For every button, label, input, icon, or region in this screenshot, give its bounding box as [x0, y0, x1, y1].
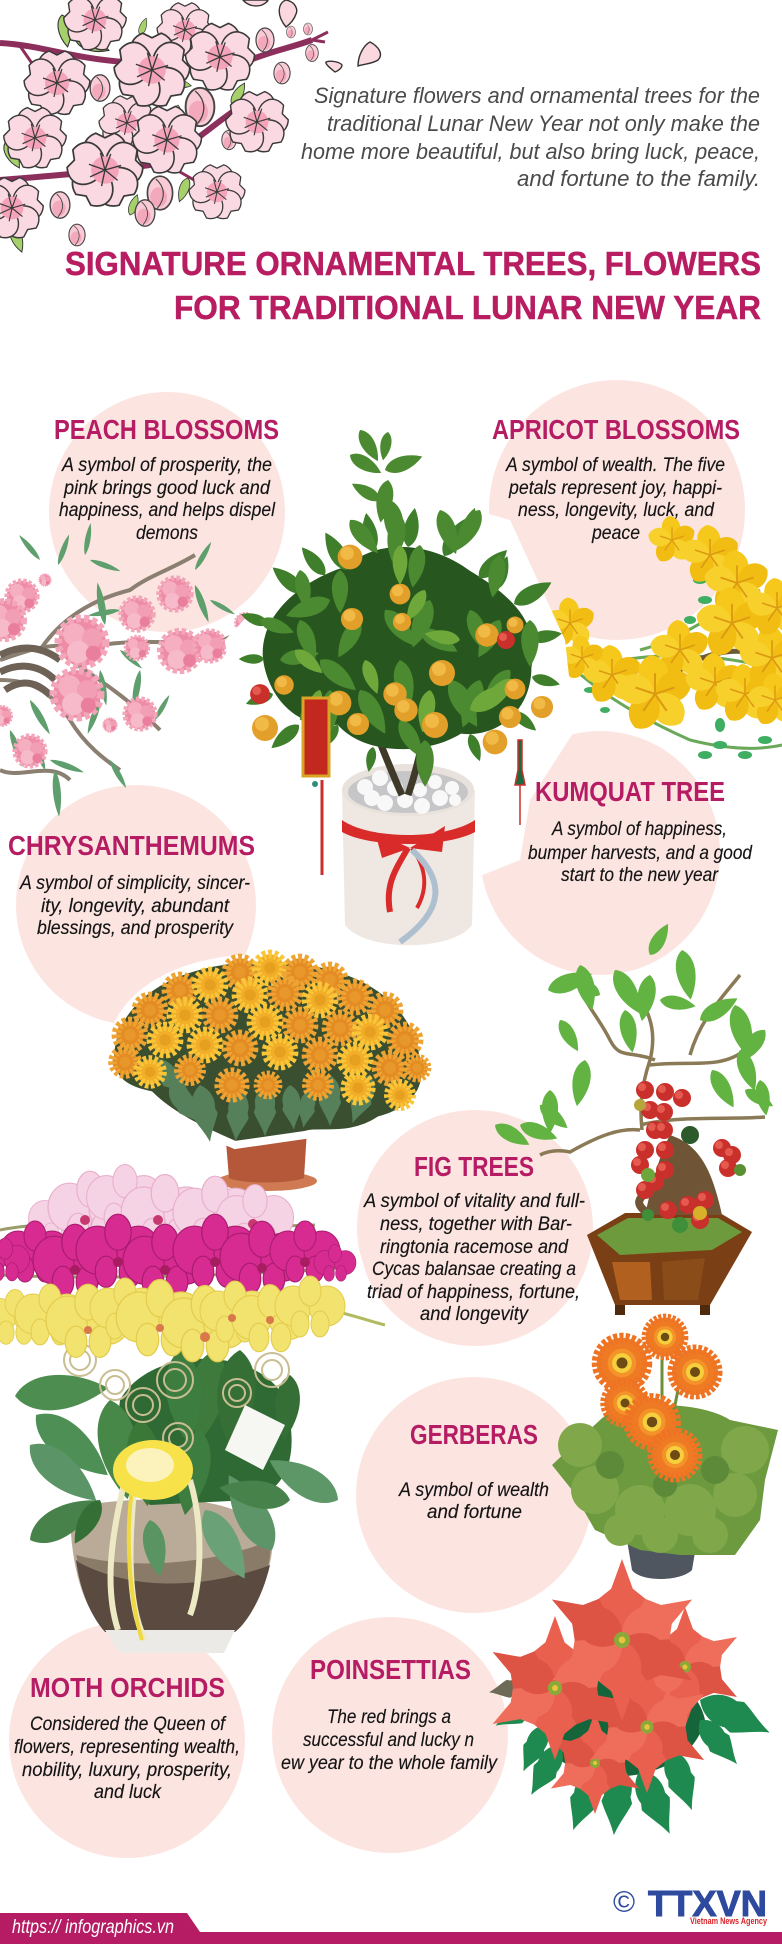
- description: [363, 1191, 585, 1325]
- red hanging tag: [303, 698, 329, 875]
- circle: poinsettias: [272, 1617, 508, 1853]
- description: [14, 1714, 240, 1803]
- description: A symbol of happiness,: [551, 819, 727, 840]
- yellow bow and ribbons: [111, 1440, 199, 1640]
- plant: gerberas: [552, 1317, 778, 1579]
- description: [398, 1480, 549, 1523]
- illustration: cherry blossom branch: [0, 0, 380, 254]
- description: [528, 819, 753, 886]
- pot: [587, 1213, 752, 1315]
- plant: moth orchids: [0, 1165, 385, 1653]
- intro text: [301, 83, 760, 191]
- description: Cycas balansae creating a: [372, 1259, 576, 1280]
- panel text: moth orchids: [14, 1672, 240, 1803]
- description: Considered the Queen of: [30, 1714, 227, 1735]
- plant: fig tree bonsai: [491, 920, 776, 1315]
- description: petals represent joy, happi-: [508, 478, 722, 499]
- description: [505, 455, 725, 544]
- circle: chrysanthemums: [16, 785, 256, 1025]
- footer band: [0, 1913, 782, 1944]
- panel text: apricot blossoms: [492, 414, 740, 544]
- description: A symbol of wealth: [398, 1480, 549, 1501]
- description: A symbol of simplicity, sincer-: [19, 873, 250, 894]
- title: SIGNATURE ORNAMENTAL TREES, FLOWERS: [65, 245, 761, 282]
- falling petals: [243, 0, 380, 72]
- heading: GERBERAS: [410, 1419, 538, 1450]
- magenta orchid row: [0, 1214, 356, 1297]
- description: successful and lucky n: [303, 1730, 474, 1751]
- description: triad of happiness, fortune,: [367, 1282, 580, 1303]
- orchid leaves: [13, 1347, 345, 1586]
- intro text: Signature flowers and ornamental trees for the: [314, 83, 760, 108]
- panel text: gerberas: [398, 1419, 549, 1523]
- circle: kumquat tree: [480, 731, 720, 975]
- description: and longevity: [420, 1304, 529, 1325]
- description: ew year to the whole family: [281, 1753, 498, 1774]
- panel text: fig trees: [363, 1151, 585, 1325]
- description: start to the new year: [561, 865, 719, 886]
- pot: [342, 764, 475, 945]
- green charm: [515, 740, 525, 825]
- intro text: and fortune to the family.: [517, 166, 760, 191]
- description: and luck: [94, 1782, 162, 1803]
- heading: POINSETTIAS: [310, 1654, 471, 1685]
- white halo: [225, 500, 575, 960]
- footer url: https:// infographics.vn: [12, 1917, 174, 1938]
- intro text: traditional Lunar New Year not only make the: [327, 111, 760, 136]
- heading: APRICOT BLOSSOMS: [492, 414, 740, 445]
- description: demons: [136, 523, 198, 544]
- circle: fig trees: [357, 1110, 593, 1346]
- plant: kumquat tree: [225, 427, 575, 960]
- description: flowers, representing wealth,: [14, 1737, 240, 1758]
- logo: TTXVN Vietnam News Agency: TTXVN: [648, 1883, 767, 1924]
- pot: [217, 1130, 317, 1191]
- description: ity, longevity, abundant: [41, 896, 230, 917]
- description: happiness, and helps dispel: [59, 500, 276, 521]
- panel text: poinsettias: [281, 1654, 498, 1774]
- description: peace: [591, 523, 640, 544]
- description: nobility, luxury, prosperity,: [22, 1760, 232, 1781]
- panel text: peach blossoms: [54, 414, 279, 544]
- description: [281, 1707, 498, 1774]
- pot: [627, 1540, 697, 1579]
- plant: chrysanthemums: [110, 954, 428, 1191]
- plant: poinsettias: [482, 1559, 777, 1840]
- panel text: kumquat tree: [528, 776, 753, 886]
- panel text: chrysanthemums: [8, 830, 255, 939]
- plant: apricot blossom branch: [540, 516, 782, 759]
- description: ness, together with Bar-: [380, 1214, 572, 1235]
- white halo: [0, 1200, 385, 1632]
- circle: gerberas: [356, 1377, 592, 1613]
- description: and fortune: [427, 1502, 522, 1523]
- circle: peach blossoms: [49, 392, 285, 632]
- description: A symbol of prosperity, the: [61, 455, 272, 476]
- description: ringtonia racemose and: [380, 1237, 569, 1258]
- description: A symbol of wealth. The five: [505, 455, 725, 476]
- circle: apricot blossoms: [489, 380, 745, 640]
- branches: [540, 975, 765, 1155]
- circle: moth orchids: [9, 1622, 245, 1858]
- heading: PEACH BLOSSOMS: [54, 414, 279, 445]
- pot: [70, 1499, 272, 1653]
- tag card: [225, 1405, 285, 1470]
- heading: CHRYSANTHEMUMS: [8, 830, 255, 861]
- title: [65, 245, 761, 326]
- heading: FIG TREES: [414, 1151, 534, 1182]
- description: The red brings a: [327, 1707, 451, 1728]
- background pink circles: [9, 380, 745, 1858]
- description: [59, 455, 276, 544]
- description: pink brings good luck and: [63, 478, 271, 499]
- intro text: home more beautiful, but also bring luck, peace,: [301, 139, 760, 164]
- pink orchid row: [0, 1165, 315, 1252]
- title: FOR TRADITIONAL LUNAR NEW YEAR: [174, 289, 761, 326]
- description: bumper harvests, and a good: [528, 843, 753, 864]
- description: A symbol of vitality and full-: [363, 1191, 585, 1212]
- description: ness, longevity, luck, and: [518, 500, 715, 521]
- heading: KUMQUAT TREE: [535, 776, 725, 807]
- heading: MOTH ORCHIDS: [30, 1672, 225, 1703]
- description: [19, 873, 250, 939]
- plant: peach blossom branch: [0, 523, 280, 817]
- logo: TTXVN Vietnam News Agency: ©: [613, 1886, 635, 1919]
- golden wire rings: [64, 1344, 289, 1453]
- description: blessings, and prosperity: [37, 918, 234, 939]
- yellow orchid row: [0, 1276, 385, 1362]
